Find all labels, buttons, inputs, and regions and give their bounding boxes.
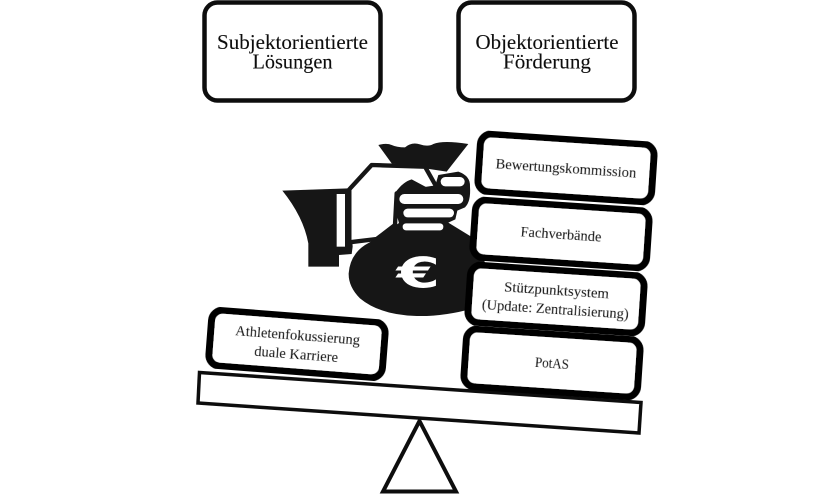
panel: Objektorientierte Förderung: Förderung [503, 50, 591, 74]
panel: Objektorientierte Förderung: Objektorientierte [476, 30, 618, 54]
hand [349, 165, 437, 242]
icon: hand holding euro money bag [282, 142, 490, 316]
panel: PotAS: PotAS [534, 355, 569, 373]
panel: Subjektorientierte Lösungen: Lösungen [252, 50, 333, 74]
panel: Stützpunktsystem [467, 264, 645, 334]
bag body [349, 220, 490, 316]
finger highlights [399, 194, 463, 204]
panel: PotAS [463, 328, 641, 398]
fingers [395, 172, 470, 233]
panel: Bewertungskommission: Bewertungskommission [495, 156, 637, 182]
seesaw triangle [383, 421, 456, 492]
panel: Bewertungskommission [477, 133, 655, 203]
euro sign: € [394, 249, 440, 298]
panel: Athletenfokussierung duale Karriere: duale Karriere [254, 344, 339, 366]
panel: Objektorientierte Förderung [458, 2, 634, 100]
shirt cuff [282, 188, 353, 267]
panel: Athletenfokussierung duale Karriere: Athletenfokussierung [235, 323, 361, 349]
panel: Athletenfokussierung duale Karriere [208, 309, 386, 379]
panel: Fachverbände: Fachverbände [520, 224, 602, 246]
bag knot [378, 142, 468, 172]
cuff highlight [337, 194, 345, 247]
panel: Subjektorientierte Lösungen: Subjektorientierte [217, 30, 368, 54]
panel: Fachverbände [472, 199, 650, 269]
panel: Stützpunktsystem: Stützpunktsystem [504, 280, 610, 303]
panel: Stützpunktsystem: (Update: Zentralisierung) [481, 297, 629, 323]
seesaw beam [198, 372, 641, 433]
panel: Subjektorientierte Lösungen [204, 2, 380, 100]
